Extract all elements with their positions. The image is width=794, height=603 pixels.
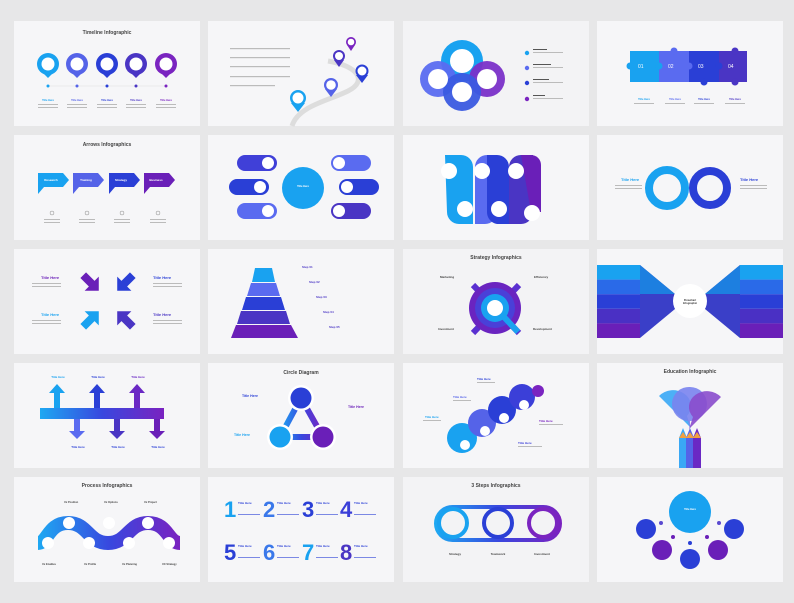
item labels: Title Here — [277, 501, 291, 505]
step labels: Step 02 — [309, 280, 320, 284]
step labels: Step 04 — [323, 310, 334, 314]
icons and text — [44, 211, 166, 223]
balloons — [659, 387, 721, 429]
labels: Title Here — [425, 415, 439, 419]
arrow flags: Training — [80, 178, 92, 182]
labels: Title Here — [729, 97, 741, 101]
arrow flags: Research — [44, 178, 58, 182]
item labels: Title Here — [277, 544, 291, 548]
bullets — [525, 49, 563, 101]
labels: Title Here — [242, 394, 258, 398]
texts: Title Here — [153, 312, 172, 317]
labels: Title Here — [51, 375, 65, 379]
capsule — [436, 507, 560, 540]
labels: Marketing — [440, 275, 454, 279]
title: Timeline Infographic — [83, 30, 132, 36]
puzzle pieces: 01 — [638, 64, 644, 70]
slide: education — [597, 363, 783, 468]
labels: Title Here — [151, 445, 165, 449]
item labels: Title Here — [354, 501, 368, 505]
numbers: 8 — [340, 540, 352, 565]
title: 3 Steps Infographics — [471, 483, 521, 489]
item labels — [238, 501, 376, 558]
funnel: Infographic — [683, 301, 698, 305]
labels: Investment — [438, 327, 454, 331]
labels: Title Here — [539, 419, 553, 423]
labels: Title Here — [348, 405, 364, 409]
slide: staircase — [403, 363, 589, 468]
wave — [38, 517, 180, 549]
center circle: Title Here — [297, 184, 309, 188]
step labels: Step 03 — [316, 295, 327, 299]
center circle — [282, 167, 324, 209]
title: Arrows Infographics — [83, 142, 132, 148]
slide: process — [14, 477, 200, 582]
numbers: 1 — [224, 497, 236, 522]
slide: funnel — [597, 249, 783, 354]
arrow flags — [38, 173, 175, 194]
labels: UX Strategy — [162, 562, 177, 566]
item labels: Title Here — [238, 501, 252, 505]
item labels: Title Here — [238, 544, 252, 548]
rings — [649, 170, 727, 206]
funnel: Flowchart — [684, 298, 696, 302]
numbers: 3 — [302, 497, 314, 522]
arrows — [49, 384, 165, 439]
ribbon — [441, 155, 541, 224]
numbers — [224, 497, 353, 565]
labels: Ux Planning — [122, 562, 137, 566]
labels — [234, 394, 364, 437]
funnel — [597, 265, 783, 338]
labels: Title Here — [669, 97, 681, 101]
step labels: Title Here — [130, 98, 142, 102]
texts — [615, 177, 767, 189]
step labels: Step 05 — [329, 325, 340, 329]
slide: arrows steps — [14, 363, 200, 468]
labels: Ux Options — [104, 500, 118, 504]
labels: Title Here — [111, 445, 125, 449]
target — [469, 282, 521, 334]
labels: Title Here — [453, 395, 467, 399]
puzzle pieces: 04 — [728, 64, 734, 70]
labels: Ux Project — [144, 500, 157, 504]
slide: infinity — [597, 135, 783, 240]
text list — [230, 48, 290, 86]
texts — [32, 275, 182, 324]
puzzle pieces: 02 — [668, 64, 674, 70]
slide: numbers — [208, 477, 394, 582]
slide: converging arrows — [14, 249, 200, 354]
step labels: Title Here — [101, 98, 113, 102]
labels — [449, 552, 550, 556]
labels — [423, 377, 563, 447]
step labels — [38, 98, 176, 108]
labels: Title Here — [91, 375, 105, 379]
numbers: 2 — [263, 497, 275, 522]
item labels: Title Here — [316, 544, 330, 548]
labels: Development — [533, 327, 552, 331]
step labels: Title Here — [160, 98, 172, 102]
numbers: 4 — [340, 497, 353, 522]
road — [292, 61, 358, 126]
step labels: Title Here — [71, 98, 83, 102]
texts: Title Here — [740, 177, 759, 182]
slide: pyramid — [208, 249, 394, 354]
arrows — [76, 268, 140, 334]
labels — [51, 375, 165, 449]
title: Strategy Infographics — [470, 255, 522, 261]
slide: roadmap pins — [208, 21, 394, 126]
labels — [634, 97, 745, 104]
labels — [42, 500, 177, 566]
step labels — [302, 265, 340, 329]
labels: Title Here — [71, 445, 85, 449]
title: Circle Diagram — [283, 370, 319, 376]
slide: mind map — [208, 135, 394, 240]
steps — [447, 384, 544, 453]
circles — [420, 40, 505, 111]
pins — [290, 37, 368, 112]
numbers: 5 — [224, 540, 236, 565]
numbers: 6 — [263, 540, 275, 565]
satellites — [636, 519, 744, 569]
item labels: Title Here — [316, 501, 330, 505]
labels — [438, 275, 552, 331]
arrow flags: Strategy — [115, 178, 127, 182]
triangle circles — [267, 385, 336, 450]
texts: Title Here — [621, 177, 640, 182]
slide: circle hub — [597, 477, 783, 582]
title: Education Infographic — [664, 369, 717, 375]
labels: Teamwork — [491, 552, 506, 556]
slide: circle diagram — [208, 363, 394, 468]
labels: Title Here — [477, 377, 491, 381]
labels: Title Here — [234, 433, 250, 437]
pencils — [679, 428, 701, 468]
arrow flags: Business — [149, 178, 163, 182]
labels: Ux Profile — [84, 562, 97, 566]
pyramid — [231, 268, 298, 338]
slide: 3 steps — [403, 477, 589, 582]
labels: Strategy — [449, 552, 461, 556]
labels: Title Here — [698, 97, 710, 101]
step labels: Title Here — [42, 98, 54, 102]
slide: circles cluster — [403, 21, 589, 126]
labels: Ux Enables — [42, 562, 57, 566]
labels: Investment — [534, 552, 550, 556]
title: Process Infographics — [82, 483, 133, 489]
slide: wave ribbon — [403, 135, 589, 240]
numbers: 7 — [302, 540, 314, 565]
hub: Title Here — [684, 507, 696, 511]
labels: Ux Position — [64, 500, 79, 504]
texts: Title Here — [153, 275, 172, 280]
labels: Title Here — [638, 97, 650, 101]
step labels: Step 01 — [302, 265, 313, 269]
slide: puzzle — [597, 21, 783, 126]
band — [40, 408, 164, 419]
texts: Title Here — [41, 275, 60, 280]
puzzle pieces: 03 — [698, 64, 704, 70]
labels: Title Here — [518, 441, 532, 445]
pills — [229, 155, 379, 219]
hub — [669, 491, 711, 533]
labels: Title Here — [131, 375, 145, 379]
slide: timeline infographic — [14, 21, 200, 126]
slide: arrows infographics — [14, 135, 200, 240]
labels: Efficiency — [534, 275, 549, 279]
texts: Title Here — [41, 312, 60, 317]
pins — [37, 53, 177, 88]
slide: strategy — [403, 249, 589, 354]
item labels: Title Here — [354, 544, 368, 548]
puzzle pieces — [626, 48, 747, 86]
